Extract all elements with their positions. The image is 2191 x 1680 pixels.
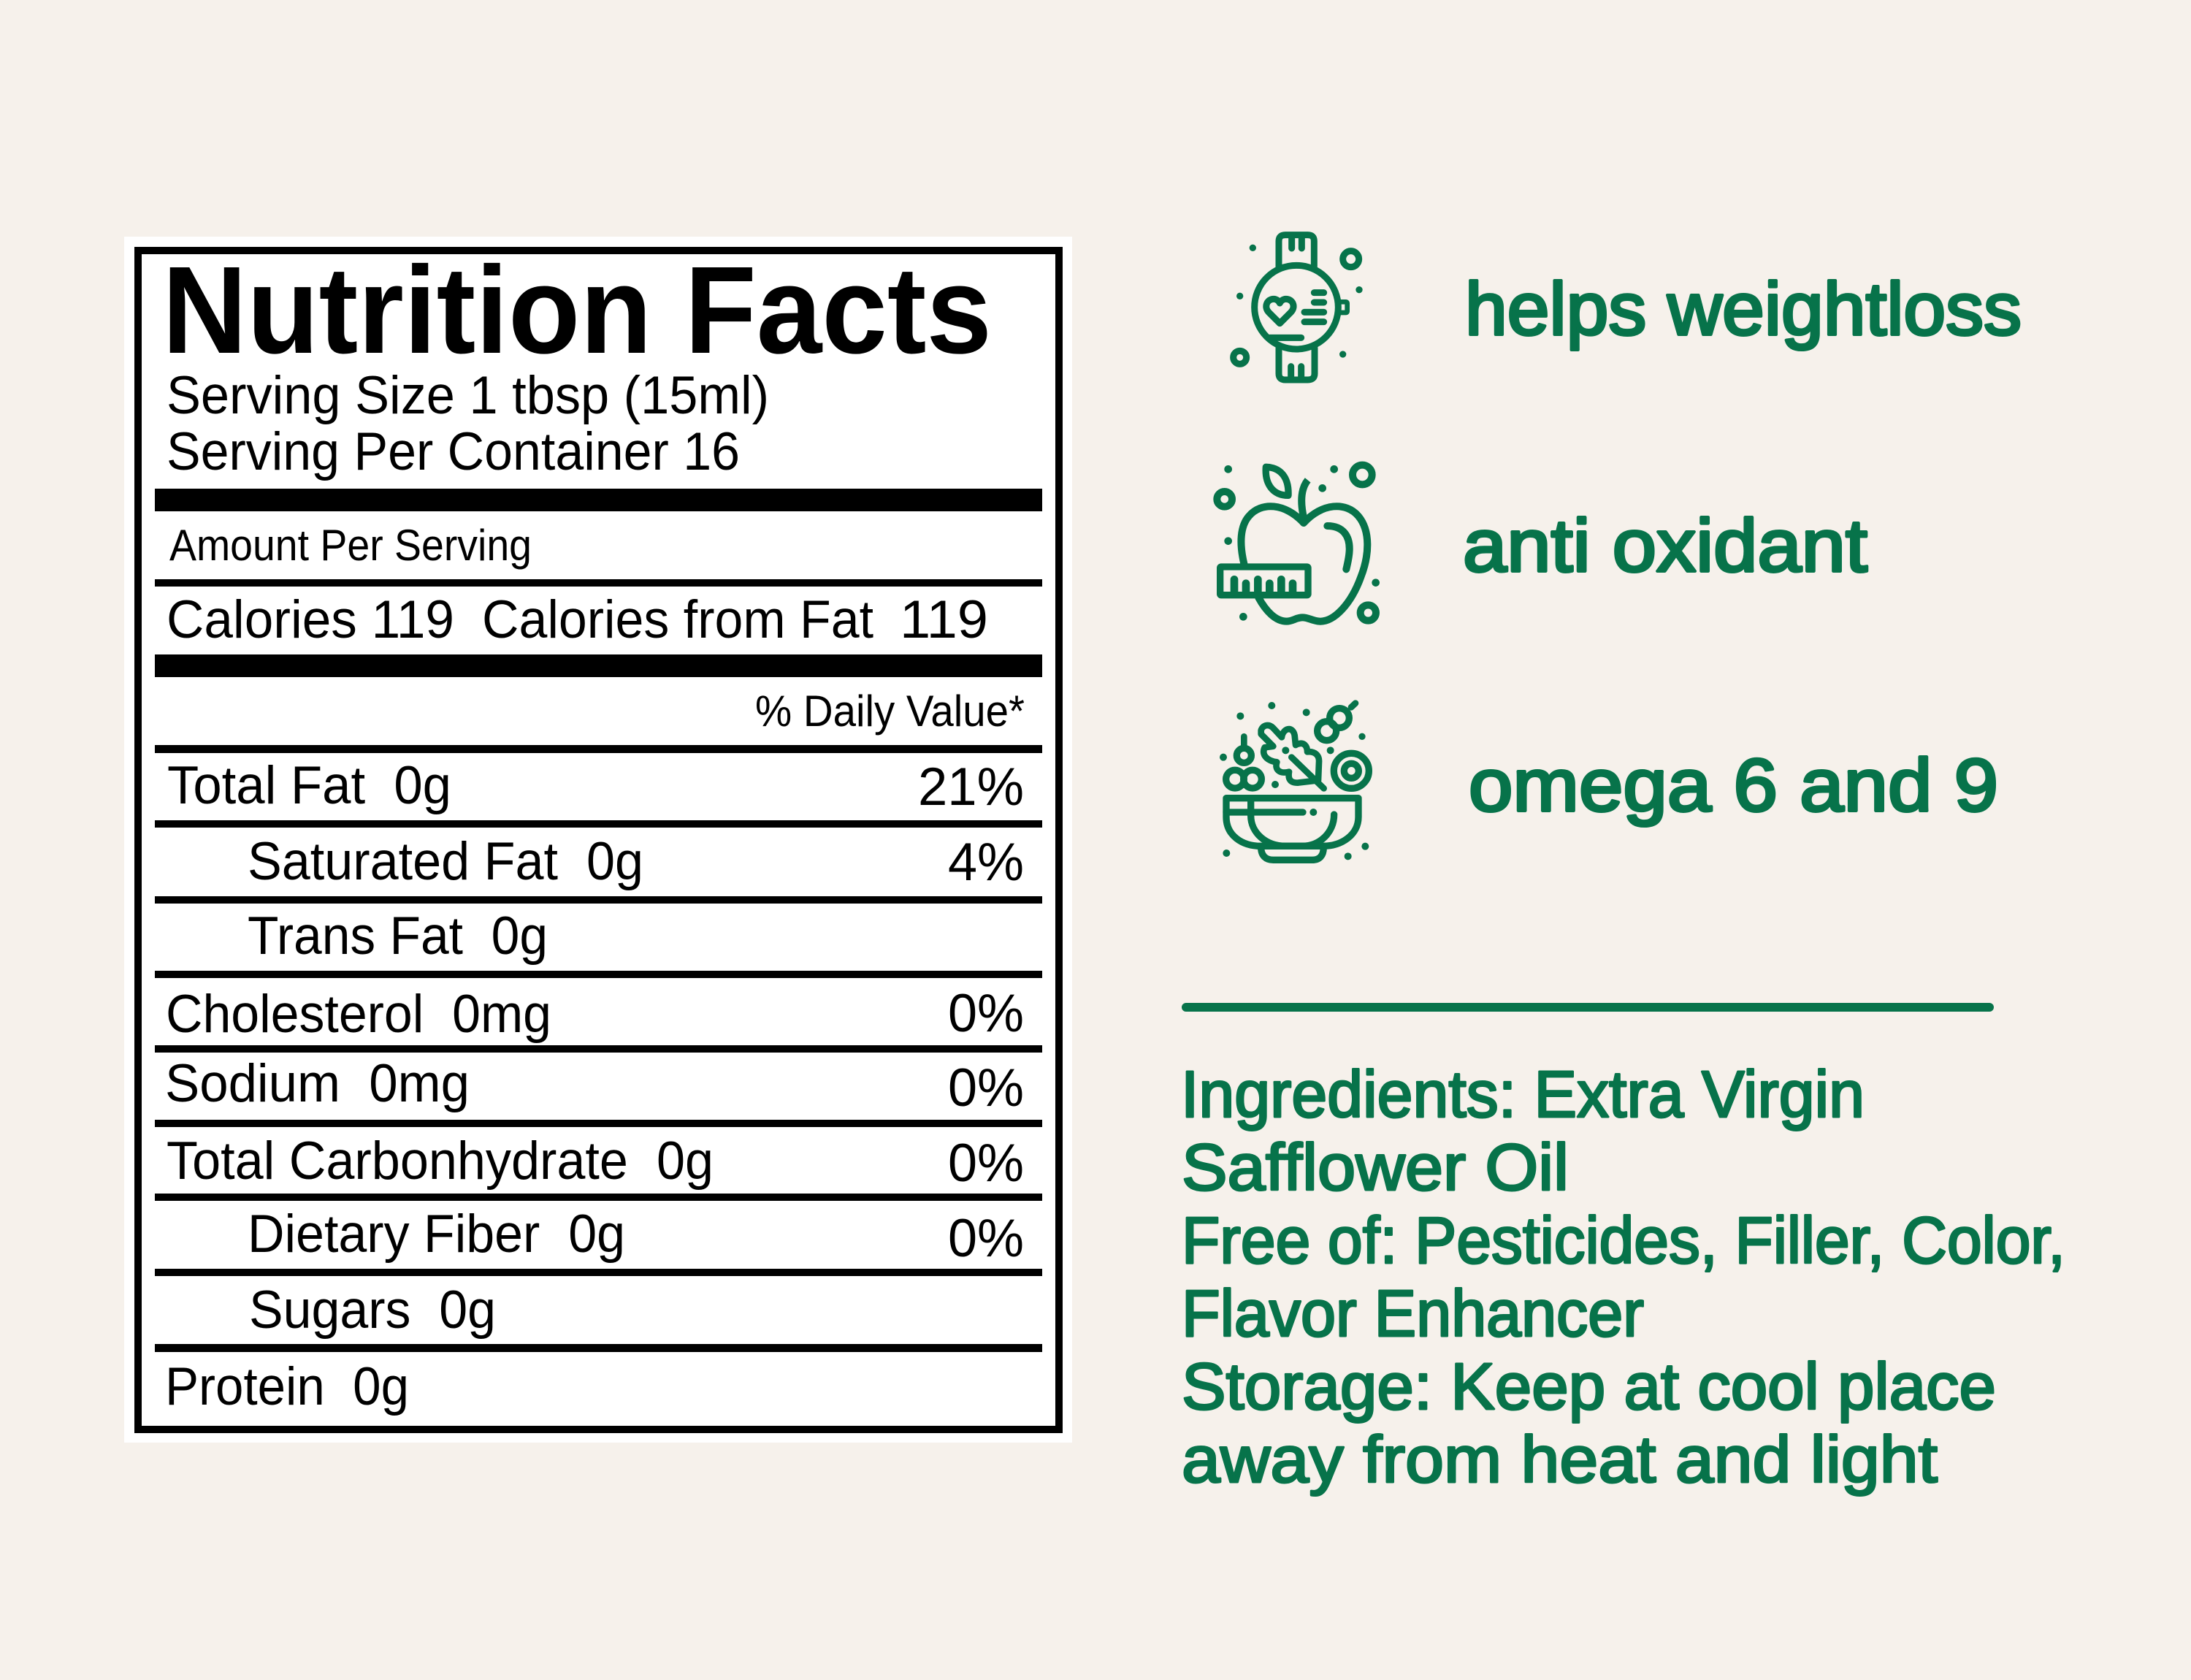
row: dietary fiber: Dietary Fiber 0g [248, 1204, 625, 1264]
row: total fat [167, 756, 1024, 817]
row: cholesterol: Cholesterol 0mg [166, 985, 551, 1044]
text block: ingredients, free of, storage [1181, 1058, 2065, 1497]
text block: ingredients, free of, storage: Flavor Enhancer [1182, 1278, 1644, 1351]
row: total fat: 21% [918, 757, 1024, 817]
row: saturated fat [248, 832, 1024, 892]
icon: apple with ruler [1217, 465, 1380, 622]
text block: ingredients, free of, storage: Free of: Pesticides, Filler, Color, [1182, 1204, 2065, 1278]
calories row: Calories from Fat [482, 590, 873, 649]
label: anti oxidant: anti oxidant [1463, 504, 1867, 587]
calories row: Calories 119 [167, 590, 454, 649]
row: sodium: 0% [948, 1058, 1024, 1118]
text block: ingredients, free of, storage: away from heat and light [1182, 1424, 1938, 1497]
calories row: 119 [900, 590, 988, 649]
row: saturated fat: 4% [948, 833, 1024, 892]
row: trans fat: Trans Fat 0g [248, 906, 548, 966]
serving size: Serving Size 1 tbsp (15ml) [167, 366, 769, 425]
row: sodium [165, 1054, 1024, 1118]
divider line [1182, 1003, 1994, 1012]
daily value heading: % Daily Value* [755, 687, 1025, 736]
row: total carbohydrate [167, 1131, 1024, 1193]
title: Nutrition Facts [162, 241, 992, 380]
text block: ingredients, free of, storage: Ingredients: Extra Virgin [1181, 1058, 1865, 1131]
row: protein: Protein 0g [165, 1357, 409, 1416]
text block: ingredients, free of, storage: Storage: Keep at cool place [1182, 1351, 1996, 1424]
row: total carbohydrate: Total Carbonhydrate 0g [167, 1131, 714, 1191]
row: saturated fat: Saturated Fat 0g [248, 832, 643, 891]
row: dietary fiber: 0% [948, 1209, 1024, 1268]
calories row [167, 590, 988, 649]
row: dietary fiber [248, 1204, 1024, 1268]
label: helps weightloss: helps weightloss [1465, 267, 2022, 351]
row: total carbohydrate: 0% [948, 1134, 1024, 1193]
icon: smartwatch with heart [1234, 235, 1363, 380]
label: omega 6 and 9: omega 6 and 9 [1469, 744, 1998, 827]
row: cholesterol: 0% [948, 984, 1024, 1043]
servings per container: Serving Per Container 16 [167, 422, 740, 481]
row: total fat: Total Fat 0g [167, 756, 451, 815]
row: sugars: Sugars 0g [249, 1280, 496, 1340]
amount per serving: Amount Per Serving [169, 521, 532, 570]
panel: nutrition facts label [124, 237, 1072, 1443]
row: sodium: Sodium 0mg [165, 1054, 470, 1113]
row: cholesterol [166, 984, 1024, 1044]
text block: ingredients, free of, storage: Safflower Oil [1182, 1131, 1569, 1204]
icon: salad bowl [1220, 702, 1369, 860]
